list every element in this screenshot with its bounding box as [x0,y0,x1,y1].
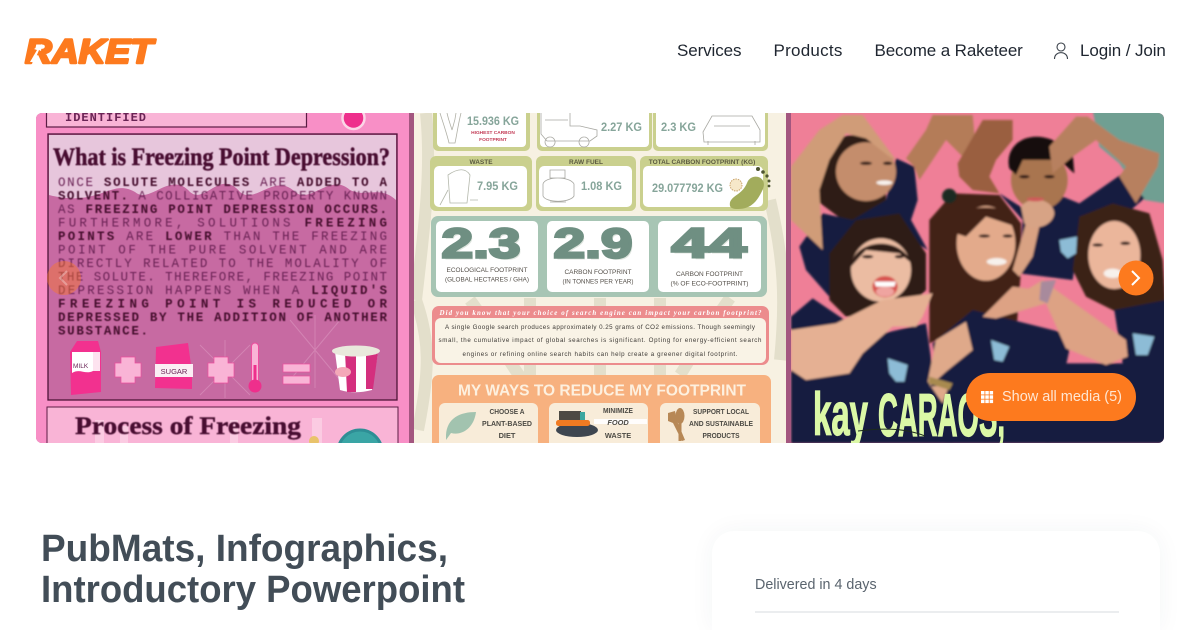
icon: gas tank [543,170,574,202]
ways to reduce panel: MY WAYS TO REDUCE MY FOOTPRINT [458,382,746,400]
heading: Process of Freezing: Process of Freezing [75,413,302,440]
stat: 44: 44 [674,222,750,268]
ways to reduce panel: MINIMIZE [603,406,633,415]
icon: jeepney [541,113,597,147]
teal wall shape [1093,110,1166,203]
stat: 2.9: (IN TONNES PER YEAR) [562,278,634,286]
ways to reduce panel: FOOD [607,418,629,427]
small hand and wrist [928,322,973,403]
search engine fact box: engines or refining online search habits can help create a greener digital footprint. [462,351,738,358]
explanation text: THE SOLUTE. THEREFORE, FREEZING POINT [58,270,387,284]
search engine fact box: A single Google search produces approximately 0.25 grams of CO2 emissions. Though seemingly [445,324,756,331]
media gallery [36,113,1164,443]
explanation text: DEPRESSION HAPPENS WHEN A LIQUID'S [58,284,387,298]
icon: wooden spoons [668,408,685,441]
stat: 2.3: (GLOBAL HECTARES / GHA) [445,276,529,284]
icon: sugar bag: SUGAR [161,367,188,376]
explanation text: POINTS ARE LOWER THAN THE FREEZING [58,230,387,244]
ways to reduce panel: WASTE [605,431,631,440]
ways to reduce panel: SUPPORT LOCAL [693,407,749,416]
nav link: Products: Products [774,41,843,60]
delivery card [712,531,1160,630]
ways to reduce panel: PLANT-BASED [482,419,533,428]
stat: 44: (% OF ECO-FOOTPRINT) [670,280,748,288]
icon: trash bag [440,170,478,205]
row 2: waste, raw fuel, total [430,156,770,211]
explanation text: FURTHERMORE, SOLUTIONS FREEZING [58,216,387,230]
icon: car [703,116,760,145]
nav link: Login / Join: Login / Join [1080,41,1166,60]
logo: RAKET: RAKET [25,33,157,70]
value: 2.3 KG: 2.3 KG [661,120,696,134]
previous arrow button [47,261,81,295]
explanation text: ONCE SOLUTE MOLECULES ARE ADDED TO A [58,176,387,190]
delivery time text: Delivered in 4 days [755,577,877,593]
navigation bar [677,41,1166,60]
icon: user [1054,42,1068,59]
row 1: emission cards: HIGHEST CARBON [471,130,515,136]
icon: grid [981,391,993,403]
stat: 2.9: CARBON FOOTPRINT [564,269,632,276]
explanation text: SOLVENT. A COLLIGATIVE PROPERTY KNOWN [58,190,387,204]
stat: 44: CARBON FOOTPRINT [676,271,743,278]
title [41,528,465,611]
facial details [860,162,1130,258]
search engine fact box [432,306,769,365]
explanation text: AS FREEZING POINT DEPRESSION OCCURS. [58,203,387,217]
explanation box [48,134,397,400]
stat: 2.3: 2.3 [444,222,522,268]
value: 15.936 KG: 15.936 KG [467,114,519,128]
icon: milk carton [70,341,101,395]
row 1: emission cards [433,113,768,151]
front-center person [929,193,1021,343]
stat: 44: 44 [672,220,748,266]
button: show all media: Show all media (5) [1002,389,1122,405]
icon: bulldozer on food waste [556,411,598,437]
back-left person hair and shirt [816,135,886,225]
row 2: waste, raw fuel, total: TOTAL CARBON FOOTPRINT (KG) [649,159,755,166]
ways to reduce panel: CHOOSE A [490,407,525,416]
icon: light bulb [440,113,461,143]
icon: plus [115,357,141,383]
front-right person [1073,203,1166,313]
back-right person shirt [999,173,1144,280]
explanation text: FREEZING POINT IS REDUCED OR [58,298,387,312]
back-right arms [1049,117,1159,203]
explanation text: POINT OF THE PURE SOLVENT AND ARE [58,244,387,258]
back-left arms [791,115,896,250]
ways to reduce panel: PRODUCTS [702,431,740,440]
explanation text: DEPRESSED BY THE ADDITION OF ANOTHER [58,311,387,325]
value: 29.077792 KG: 29.077792 KG [652,181,723,195]
icon: equals [283,364,310,384]
photo caption: kay CARAOS, [813,381,1005,449]
ways to reduce panel: AND SUSTAINABLE [689,419,753,428]
title: PubMats, Infographics, [41,528,448,570]
row 2: waste, raw fuel, total: RAW FUEL [569,159,603,166]
hand-front sign [983,287,1039,318]
photo illustration [791,110,1166,443]
icon: thermometer [248,343,262,392]
ways to reduce panel [432,375,771,443]
explanation text: DIRECTLY RELATED TO THE MOLALITY OF [58,257,387,271]
stat: 2.3: ECOLOGICAL FOOTPRINT [446,267,528,274]
search engine fact box: Did you know that your choice of search engine can impact your carbon footprint? [438,310,762,317]
stat: 2.9: 2.9 [556,222,634,268]
icon: milk carton: MILK [73,363,89,370]
stat: 2.3: 2.3 [442,220,520,266]
icon: pink dot [342,107,364,129]
ways to reduce panel: DIET [499,431,516,440]
explanation text [58,176,387,338]
panel: freezing point infographic [36,113,409,443]
icon: plus [208,357,234,383]
front-left pointing arm [791,293,933,380]
top label box [46,113,308,128]
icon: teal donut [338,428,382,443]
nav link: Become a Raketeer: Become a Raketeer [874,41,1023,60]
panel: group photo [791,110,1166,449]
stat: 2.9: 2.9 [554,220,632,266]
icon: footprint [730,167,770,209]
value: 2.27 KG: 2.27 KG [601,120,642,134]
value: 7.95 KG: 7.95 KG [477,179,518,193]
shirt badges [888,237,1154,382]
heading: What is Freezing Point Depression?: What is Freezing Point Depression? [53,144,390,171]
icon: ice cream bucket [332,346,380,392]
title: Introductory Powerpoint [41,569,465,611]
process of freezing box [46,406,398,443]
icon: leaf [446,412,476,440]
row 1: emission cards: FOOTPRINT [479,137,507,143]
footprint stats panel [431,216,767,297]
next arrow button [1118,260,1154,296]
front-center raised forearm and fist [1013,223,1039,277]
stat: 2.9 [554,227,634,285]
front-center lower arm [983,280,1128,365]
row 2: waste, raw fuel, total: WASTE [469,159,493,166]
stat: 44 [670,227,748,287]
smiles [876,180,1122,278]
explanation text: SUBSTANCE. [58,324,148,338]
nav link: Services: Services [677,41,741,60]
button: show all media [966,373,1136,421]
icon: sugar bag [155,343,193,389]
search engine fact box: small, the cumulative impact of global searches is significant. Opting for energy-efficient search [438,337,762,344]
value: 1.08 KG: 1.08 KG [581,179,622,193]
front-left person [829,213,926,317]
stat: 2.3 [442,227,529,283]
panel: carbon footprint infographic [414,105,786,455]
